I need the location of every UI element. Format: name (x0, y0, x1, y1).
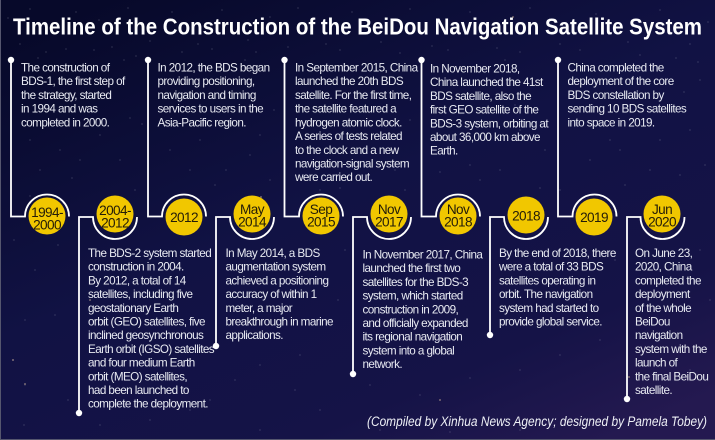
milestone: Sep 2015 (281, 57, 419, 234)
line end dot (8, 57, 14, 63)
date badge: 1994-2000: 2000 (33, 218, 62, 232)
text: Sep 2015: hydrogen atomic clock. (295, 116, 402, 129)
text: Nov 2018: BDS-3 system, orbiting at (430, 117, 549, 130)
text: Nov 2017: satellites for the BDS-3 (362, 276, 468, 289)
text: Sep 2015: launched the 20th BDS (295, 75, 404, 88)
connector: 2018 (490, 217, 548, 335)
text: May 2014: applications. (226, 329, 283, 342)
line end dot (350, 371, 356, 377)
milestone: 2012 (145, 57, 270, 235)
date badge: 2018: 2018 (512, 208, 540, 224)
connector: 2012 (148, 60, 206, 216)
text: 2012: In 2012, the BDS began (158, 62, 270, 74)
text: Sep 2015: to the clock and a new (295, 144, 400, 157)
text: 2019: BDS constellation by (568, 89, 664, 102)
date badge: Nov 2018: Nov (447, 202, 470, 217)
text: 2012: providing positioning, (158, 75, 255, 88)
text: Sep 2015: navigation-signal system (295, 158, 409, 170)
connector: 2004-2012 (79, 217, 137, 413)
text: Nov 2018: Earth. (430, 145, 458, 158)
date badge: Jun 2020: Jun (652, 202, 672, 217)
date badge: Sep 2015: 2015 (307, 214, 335, 230)
text: 1994-2000: BDS-1, the first step of (21, 75, 126, 88)
text: Nov 2017: system, which started (362, 290, 463, 303)
date badge: May 2014 (234, 196, 270, 232)
text: Jun 2020: the final BeiDou (635, 370, 708, 383)
text: Jun 2020: completed the (635, 274, 701, 287)
date badge: 2012: 2012 (170, 210, 198, 225)
date badge: Nov 2018 (440, 198, 476, 234)
text: 2019: deployment of the core (568, 75, 674, 88)
text: Nov 2017: launched the first two (362, 262, 461, 275)
text: Jun 2020: deployment (635, 288, 691, 301)
text: 1994-2000: in 1994 and was (21, 103, 98, 116)
text: Nov 2018: China launched the 41st (430, 76, 544, 89)
text: Nov 2017: construction in 2009, (362, 303, 459, 316)
line end dot (76, 410, 82, 416)
text: 2018: orbit. The navigation (499, 288, 593, 301)
text: 2004-2012: Earth orbit (IGSO) satellites (88, 343, 215, 356)
text: Jun 2020: system with the (635, 343, 707, 356)
text: Nov 2017: and officially expanded (362, 317, 468, 330)
text: 2004-2012: geostationary Earth (88, 302, 178, 315)
text: 2004-2012: orbit (MEO) satellites, (88, 370, 187, 383)
date badge: 2004-2012 (96, 196, 134, 232)
date badge: 2004-2012: 2004- (99, 203, 131, 218)
text: Nov 2018: In November 2018, (430, 62, 520, 76)
date badge: 2012 (166, 198, 202, 236)
text: 1994-2000: completed in 2000. (21, 116, 110, 129)
date badge: 2019: 2019 (580, 210, 608, 225)
text: 2004-2012: inclined geosynchronous (88, 329, 204, 342)
text: 2018: were a total of 33 BDS (498, 261, 604, 274)
text: May 2014: meter, a major (226, 302, 293, 315)
text: 1994-2000: the strategy, started (21, 89, 111, 102)
milestone: 1994-2000 (8, 57, 126, 234)
text: 2004-2012: construction in 2004. (88, 261, 184, 274)
connector: 1994-2000 (11, 60, 69, 216)
text: 2012: services to users in the (158, 103, 263, 116)
text: Jun 2020: 2020, China (635, 261, 693, 274)
text: 2019: China completed the (568, 62, 664, 74)
line end dot (281, 57, 288, 63)
text: 2019: sending 10 BDS satellites (568, 103, 687, 116)
date badge: Nov 2018: 2018 (444, 214, 472, 230)
line end dot (624, 396, 630, 402)
date badge: 2018 (508, 196, 544, 234)
text: Jun 2020: On June 23, (635, 247, 693, 260)
connector: Sep 2015 (284, 60, 343, 216)
date badge: Nov 2017: 2017 (375, 214, 403, 230)
text: May 2014: accuracy of within 1 (226, 288, 317, 301)
text: 2004-2012: had been launched to (88, 384, 190, 397)
text: Nov 2018: BDS satellite, also the (430, 90, 531, 103)
text: 2012: Asia-Pacific region. (158, 116, 246, 129)
milestone: Nov 2017 (350, 196, 483, 377)
milestone: Nov 2018 (418, 57, 549, 234)
text: 1994-2000: The construction of (21, 62, 111, 74)
date badge: Jun 2020: 2020 (648, 214, 677, 230)
date badge: 1994-2000 (28, 198, 66, 234)
text: 2004-2012: satellites, including five (88, 288, 193, 301)
connector: May 2014 (216, 217, 274, 346)
text: Nov 2018: first GEO satellite of the (430, 104, 538, 117)
text: 2004-2012: By 2012, a total of 14 (88, 274, 187, 287)
text: Jun 2020: navigation (635, 329, 683, 342)
text: 2018: system had started to (499, 302, 600, 315)
text: 2004-2012: complete the deployment. (88, 398, 208, 411)
text: Jun 2020: BeiDou (635, 316, 670, 328)
text: Jun 2020: launch of (635, 357, 679, 370)
date badge: 2004-2012: 2012 (101, 216, 129, 230)
text: Nov 2018: about 36,000 km above (430, 131, 540, 144)
text: Sep 2015: satellite. For the first time, (295, 89, 412, 102)
line end dot (555, 57, 561, 63)
date badge: May 2014: 2014 (238, 214, 267, 230)
text: Jun 2020: satellite. (635, 384, 672, 397)
date badge: Sep 2015: Sep (310, 202, 332, 217)
text: 2012: navigation and timing (158, 89, 256, 102)
line end dot (487, 332, 493, 338)
date badge: 1994-2000: 1994- (31, 205, 63, 220)
text: 2018: By the end of 2018, there (499, 247, 616, 260)
line end dot (213, 343, 219, 349)
date badge: Nov 2017: Nov (378, 202, 401, 217)
text: 2004-2012: orbit (GEO) satellites, five (88, 316, 205, 328)
connector: Nov 2017 (353, 217, 411, 374)
date badge: Jun 2020 (644, 196, 680, 232)
text: Nov 2017: network. (362, 358, 402, 371)
date badge: Sep 2015 (302, 198, 340, 234)
text: May 2014: augmentation system (226, 261, 326, 274)
milestone: 2019 (555, 57, 687, 235)
date badge: Nov 2017 (370, 196, 408, 232)
text: Sep 2015: In September 2015, China (295, 62, 419, 74)
milestone: 2018 (487, 196, 616, 338)
text: Jun 2020: of the whole (635, 302, 691, 315)
date badge: May 2014: May (240, 202, 265, 217)
text: Sep 2015: the satellite featured a (295, 103, 397, 116)
milestone: May 2014 (213, 196, 333, 349)
text: May 2014: achieved a positioning (226, 274, 328, 287)
connector: Jun 2020 (627, 217, 684, 399)
text: 2004-2012: and four medium Earth (88, 357, 195, 370)
text: Nov 2017: system into a global (362, 344, 454, 357)
text: May 2014: breakthrough in marine (226, 316, 333, 328)
connector: 2019 (558, 60, 616, 216)
text: 2018: provide global service. (499, 316, 602, 328)
text: Nov 2017: its regional navigation (362, 331, 462, 344)
connector: Nov 2018 (422, 60, 480, 216)
text: 2019: into space in 2019. (568, 116, 655, 129)
text: 2018: satellites operating in (499, 274, 596, 287)
text: May 2014: In May 2014, a BDS (226, 247, 320, 260)
text: Sep 2015: were carried out. (294, 171, 373, 184)
date badge: 2019 (576, 198, 612, 236)
line end dot (145, 57, 151, 63)
line end dot (418, 57, 425, 63)
text: Sep 2015: A series of tests related (295, 130, 402, 143)
text: 2004-2012: The BDS-2 system started (88, 247, 211, 260)
milestone: 2004-2012 (76, 196, 215, 416)
text: Nov 2017: In November 2017, China (362, 248, 483, 262)
milestone: Jun 2020 (624, 196, 708, 402)
